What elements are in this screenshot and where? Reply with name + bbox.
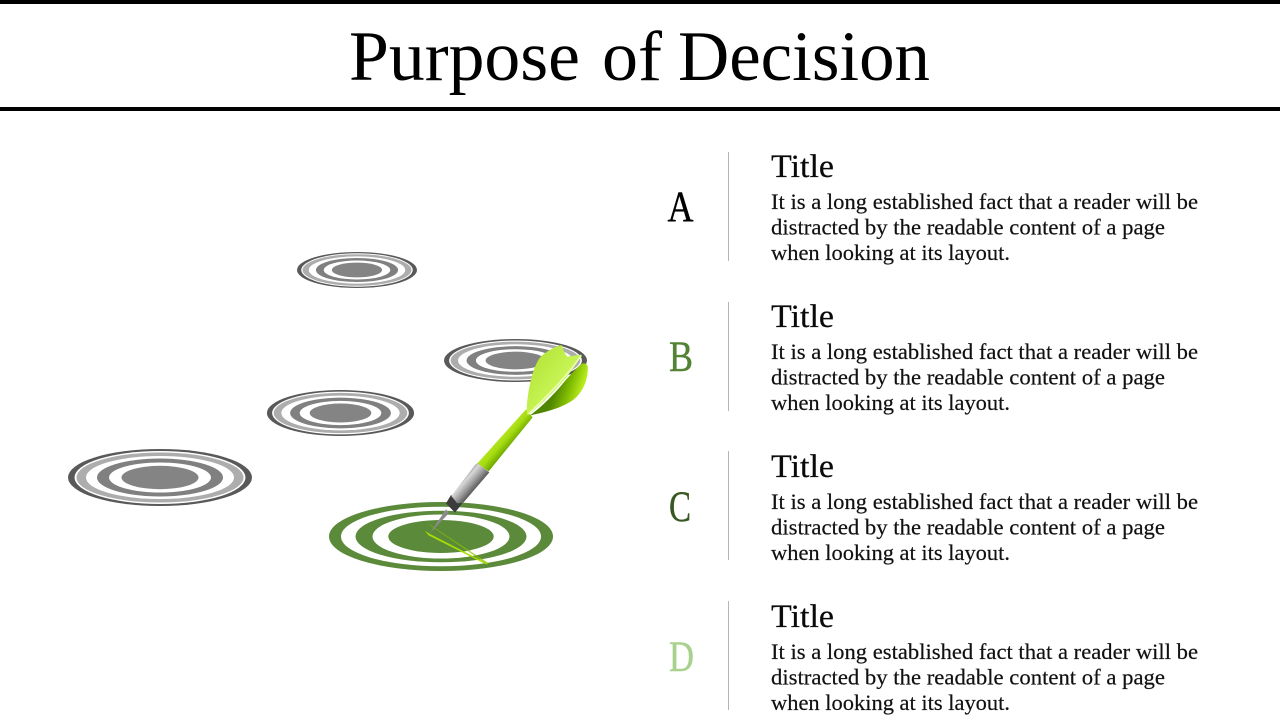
list item C [669, 449, 1198, 565]
divider B [728, 302, 729, 411]
icon: dart [425, 345, 588, 564]
title: Decision [678, 18, 930, 96]
list item B [669, 299, 1198, 415]
description B [771, 339, 1198, 415]
illustration: targets and dart [68, 252, 588, 571]
top rule [0, 0, 1280, 4]
list item A [668, 149, 1198, 265]
target: right grey [444, 339, 587, 382]
letter B: B [669, 334, 693, 381]
title A: Title [771, 149, 834, 185]
target: green bullseye [329, 502, 553, 571]
divider C [728, 451, 729, 560]
description B: when looking at its layout. [771, 390, 1010, 415]
description C: when looking at its layout. [771, 540, 1010, 565]
target: middle grey [267, 390, 414, 436]
description A: It is a long established fact that a reader will be [771, 189, 1198, 214]
letter D: D [669, 634, 694, 681]
title: Purpose [349, 18, 580, 96]
description C [771, 489, 1198, 565]
divider D [728, 601, 729, 710]
title D: Title [771, 599, 834, 635]
description C: It is a long established fact that a reader will be [771, 489, 1198, 514]
target: top grey [297, 252, 417, 288]
header bottom rule [0, 107, 1280, 111]
divider A [728, 152, 729, 261]
title C: Title [771, 449, 834, 485]
list item D [669, 599, 1198, 715]
target: large left grey [68, 449, 252, 506]
description B: It is a long established fact that a reader will be [771, 339, 1198, 364]
description D: It is a long established fact that a reader will be [771, 639, 1198, 664]
description A [771, 189, 1198, 265]
letter A: A [668, 184, 694, 231]
description D: when looking at its layout. [771, 690, 1010, 715]
title [349, 18, 930, 96]
letter C: C [669, 484, 691, 531]
description A: when looking at its layout. [771, 240, 1010, 265]
description B: distracted by the readable content of a page [771, 364, 1165, 390]
description D: distracted by the readable content of a page [771, 664, 1165, 690]
description C: distracted by the readable content of a page [771, 514, 1165, 540]
description D [771, 639, 1198, 715]
title: of [602, 18, 662, 96]
description A: distracted by the readable content of a page [771, 214, 1165, 240]
title B: Title [771, 299, 834, 335]
